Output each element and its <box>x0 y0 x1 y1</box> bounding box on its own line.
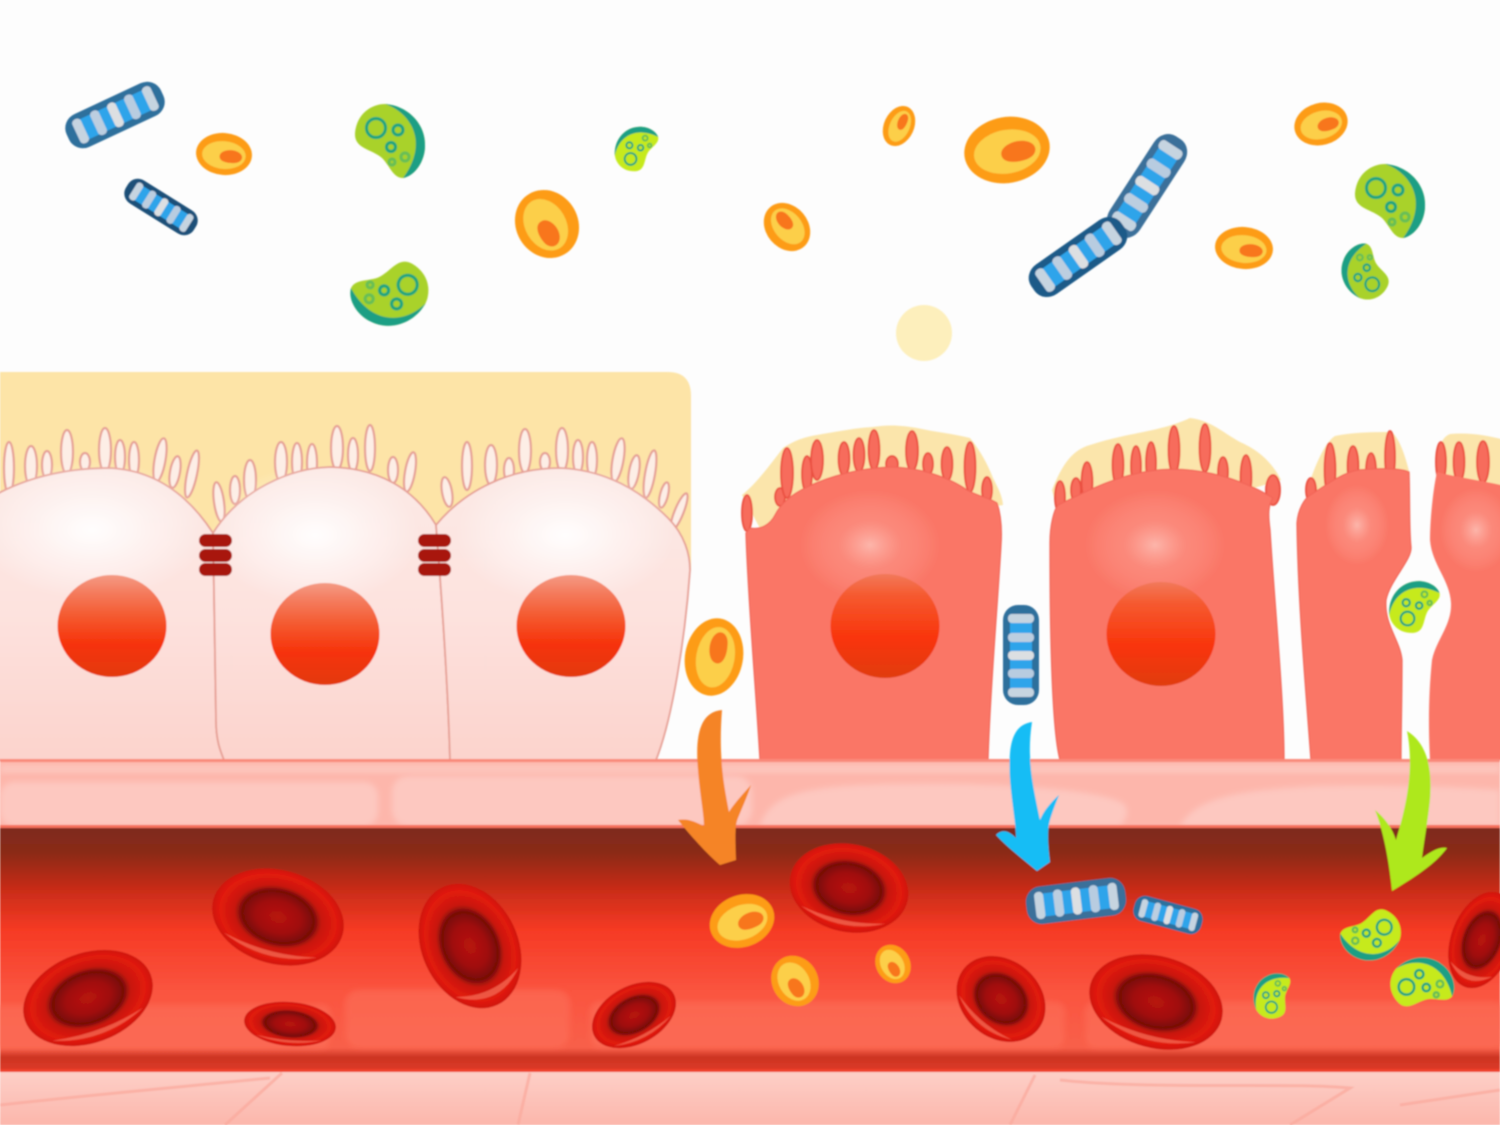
yellow cell in blood 3 <box>868 938 918 990</box>
blood vessel <box>0 828 1500 1073</box>
rod in blood large <box>1024 876 1128 926</box>
yellow cell crossing gap <box>679 614 749 700</box>
red blood cell 1 <box>201 854 355 980</box>
damaged cell A <box>746 467 1001 760</box>
thin mucus caps <box>742 418 1500 532</box>
red blood cell 9 <box>1436 882 1500 998</box>
nucleus 3 <box>516 575 626 677</box>
red blood cells <box>10 832 1500 1064</box>
panel: damaged intestinal cells <box>742 418 1500 760</box>
arrow: green <box>1375 731 1447 891</box>
yellow cell in blood 2 <box>762 947 828 1015</box>
yellow cell top 7 <box>1213 225 1275 271</box>
green bacterium in blood 1 <box>1335 898 1407 970</box>
healthy cell 1 <box>0 468 224 760</box>
green bacterium 3 <box>611 124 663 174</box>
yellow pathogens <box>194 97 1353 1015</box>
rod in blood small <box>1131 893 1205 937</box>
green bacteria <box>342 104 1464 1027</box>
green bacterium 4 <box>1355 164 1425 238</box>
red blood cell 5 <box>581 968 687 1062</box>
green bacterium 1 <box>355 104 425 178</box>
yellow cell top 3 <box>754 194 820 260</box>
green bacterium crossing gap <box>1384 578 1446 636</box>
mucus layer: healthy side <box>0 372 691 600</box>
pale particle <box>896 305 952 361</box>
red blood cell 6 <box>781 832 917 944</box>
yellow cell in blood 1 <box>702 885 782 957</box>
cell highlights <box>0 460 675 605</box>
arrow: blue <box>996 722 1059 871</box>
damaged cell microvilli <box>742 424 1489 531</box>
rod crossing gap <box>1003 605 1039 705</box>
red blood cell 8 <box>1078 940 1234 1064</box>
green bacterium 2 <box>342 245 438 339</box>
rod top left large <box>60 77 170 153</box>
nucleus 2 <box>270 583 380 685</box>
green bacterium 5 <box>1333 238 1399 306</box>
yellow cell top 1 <box>194 131 254 177</box>
healthy cell microvilli <box>4 425 691 532</box>
rod bacteria <box>60 77 1205 937</box>
nucleus 1 <box>58 575 166 677</box>
red blood cell 2 <box>399 867 541 1025</box>
yellow cell top 6 <box>1289 97 1353 151</box>
green bacterium in blood 2 <box>1380 943 1464 1027</box>
damaged cell C <box>1297 469 1411 760</box>
connective tissue band <box>0 759 1500 829</box>
red blood cell 4 <box>242 998 338 1050</box>
lower tissue <box>0 1072 1500 1125</box>
arrow: orange <box>678 710 751 865</box>
damaged cell B <box>1050 469 1284 760</box>
healthy cell 3 <box>436 468 690 760</box>
rod top right upper <box>1101 128 1193 244</box>
healthy cell 2 <box>213 467 450 760</box>
red blood cell 3 <box>10 933 166 1063</box>
green bacterium in blood 3 <box>1244 967 1304 1025</box>
panel: healthy intestinal cells <box>0 425 691 760</box>
yellow cell top 5 <box>959 110 1055 190</box>
yellow cell top 2 <box>503 178 591 270</box>
red blood cell 7 <box>939 938 1063 1060</box>
nucleus B <box>1106 582 1216 686</box>
tight junction left <box>199 534 232 576</box>
damaged cell D <box>1429 472 1500 760</box>
rod top right lower <box>1023 211 1133 303</box>
rod top left small <box>120 174 202 240</box>
tight junction right <box>418 534 451 576</box>
yellow cell top 4 <box>877 101 921 151</box>
nucleus A <box>830 574 940 678</box>
cell highlights <box>800 485 1500 600</box>
